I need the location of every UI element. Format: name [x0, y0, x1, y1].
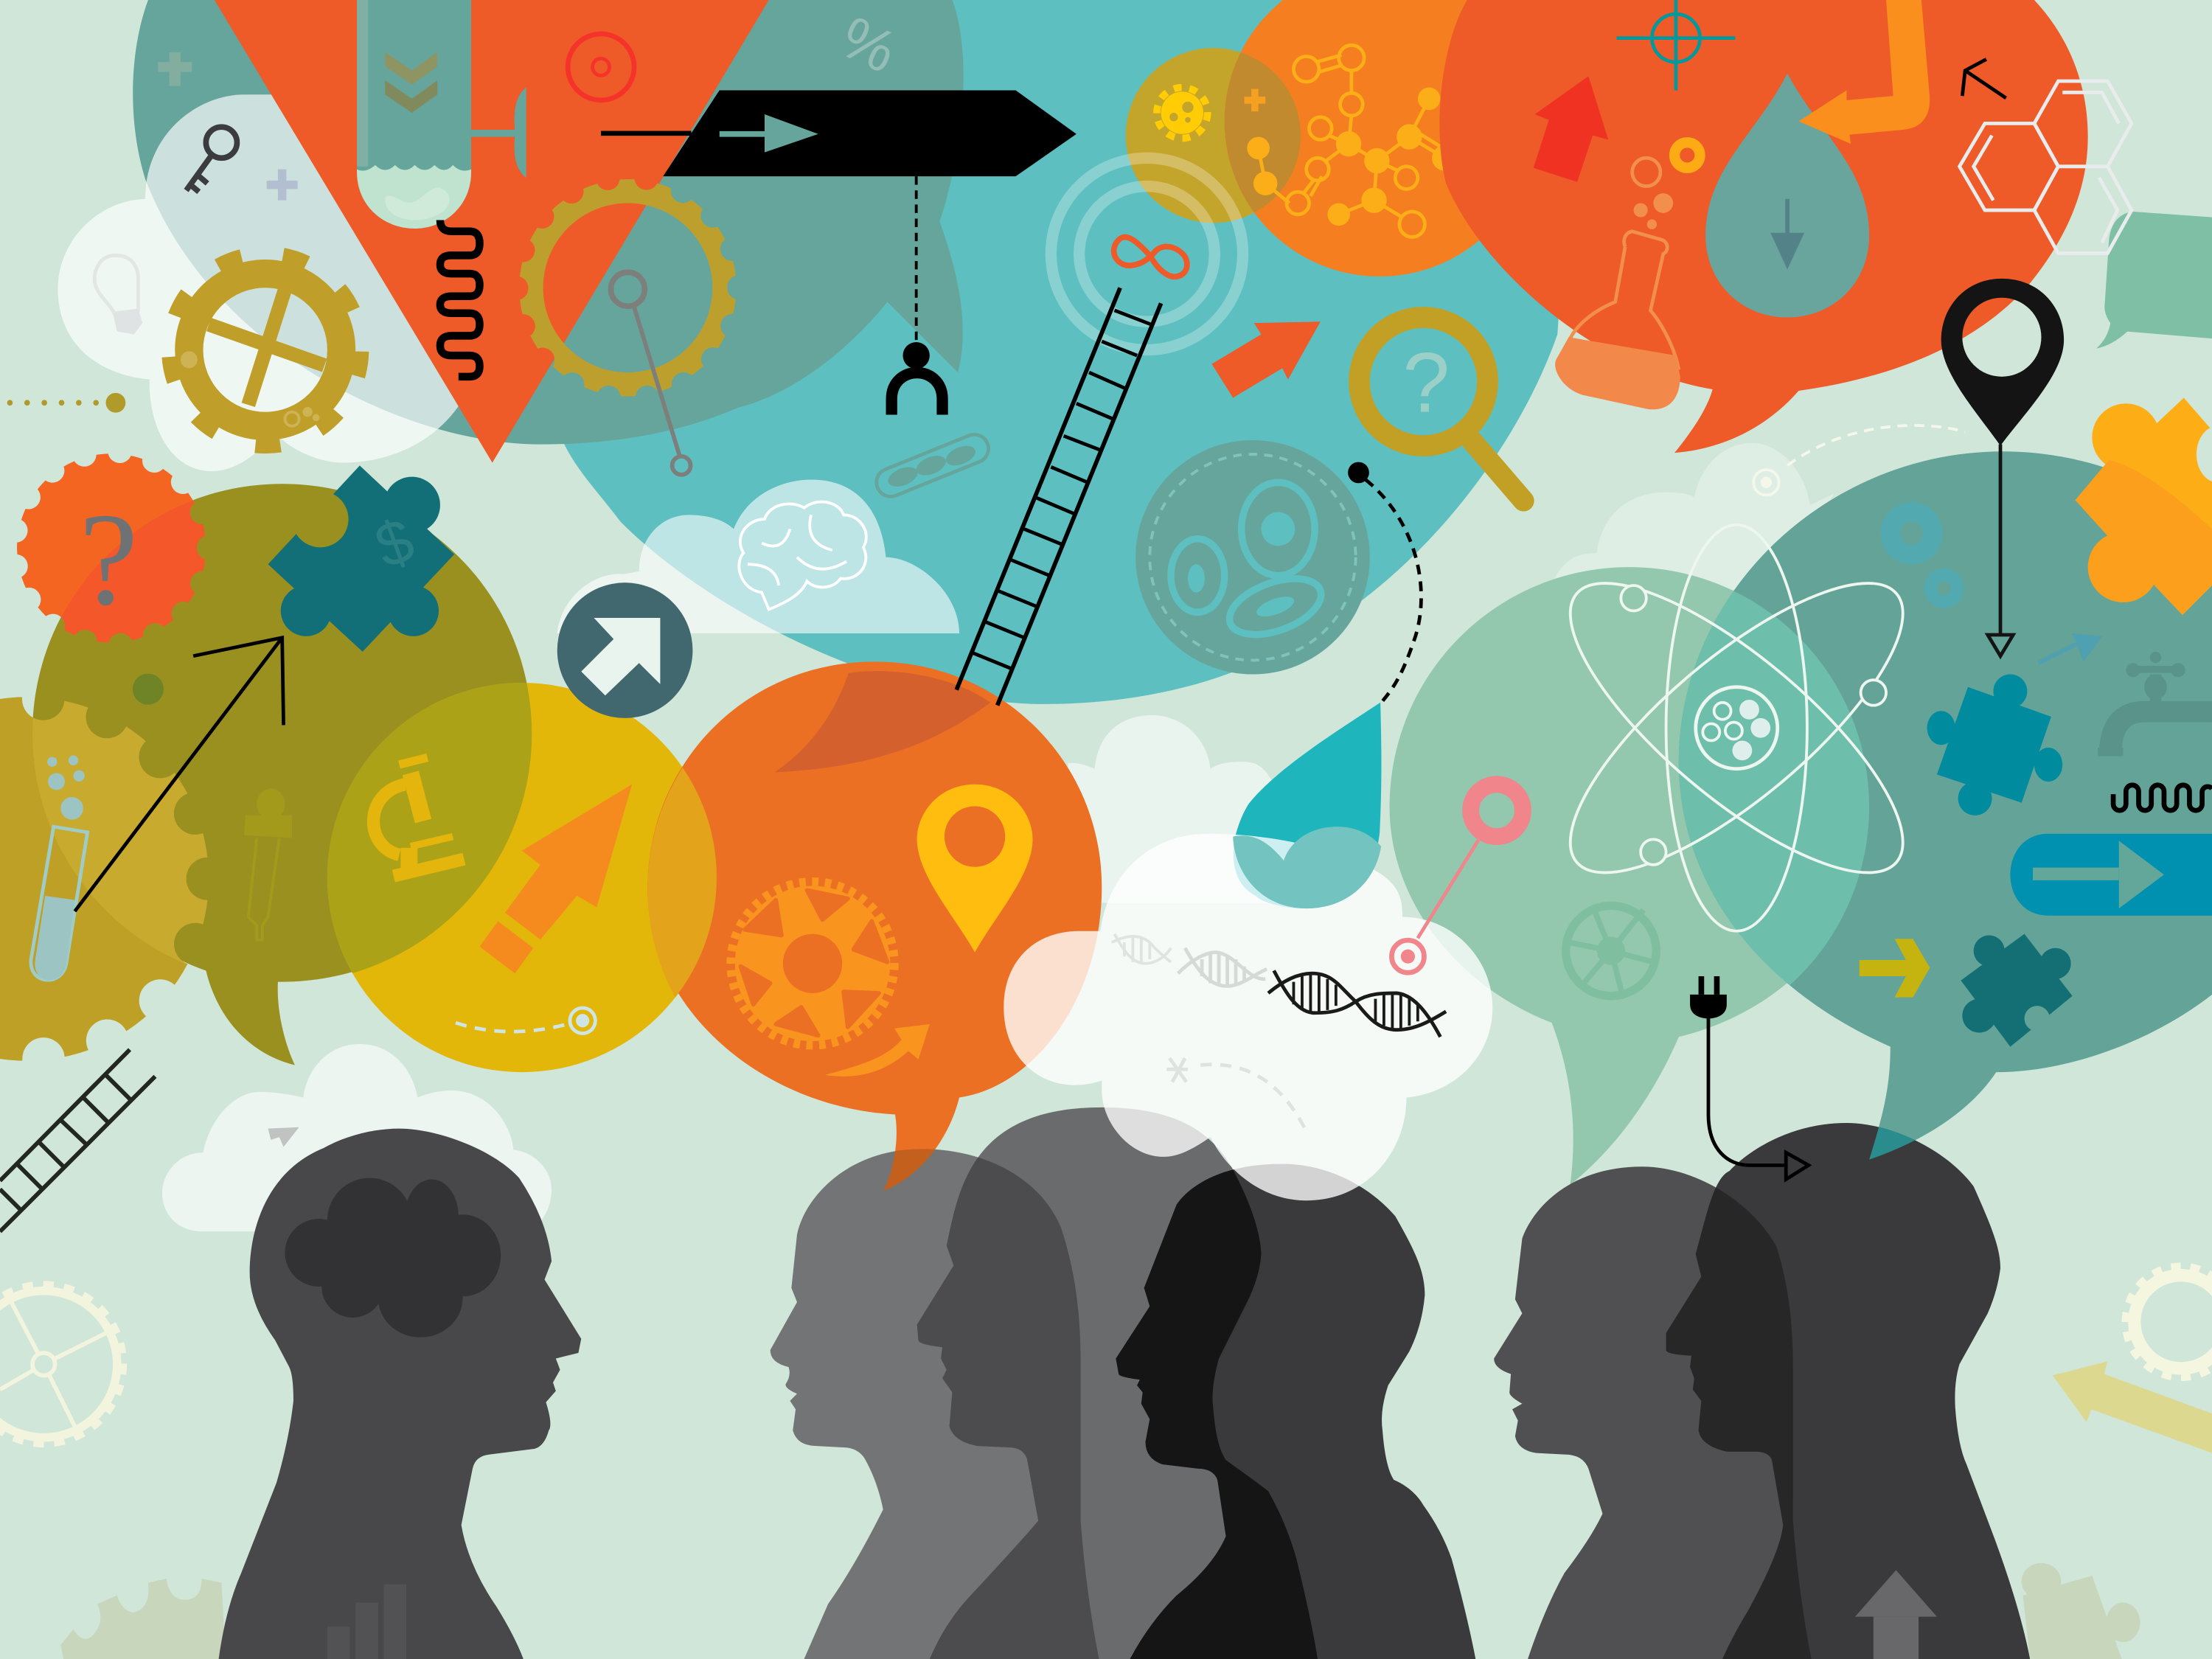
round arrow button — [557, 582, 692, 718]
overlap yellow orange — [647, 768, 717, 998]
curved arrow — [825, 1024, 930, 1077]
tail orange over head — [883, 1149, 935, 1191]
helix dark — [1268, 970, 1446, 1037]
small grey arrow — [268, 1127, 299, 1147]
bubble: olive — [32, 484, 532, 1065]
icon: key — [187, 127, 237, 192]
pill blue arrow — [2010, 834, 2212, 916]
molecule network — [1247, 45, 1472, 237]
squiggle black right — [2113, 785, 2212, 810]
magnifier — [1359, 317, 1523, 501]
gear red: ? — [79, 486, 138, 633]
plus orange — [1245, 89, 1265, 111]
puzzle blue — [1927, 675, 2062, 815]
person 5 — [1494, 1166, 1812, 1659]
red triangle — [215, 0, 769, 463]
cloud: behind left head — [162, 1044, 552, 1231]
up arrow in chest — [1855, 1570, 1937, 1659]
faucet — [2098, 652, 2212, 757]
overlap persons 5 and 6 — [1666, 1187, 1811, 1659]
overlap persons 3 and 4 — [1116, 1169, 1318, 1659]
test tube in olive — [31, 756, 88, 980]
icon: crosshair — [1617, 0, 1735, 90]
dropper — [244, 789, 292, 939]
arrow faded yellow — [2053, 1361, 2212, 1453]
atom — [1531, 525, 1942, 931]
tail teal over head — [1869, 1127, 1916, 1160]
overlap persons 2 and 3 — [917, 1158, 1099, 1659]
arrow orange bent — [1798, 0, 1930, 144]
brain shape head — [285, 1178, 501, 1338]
plus signs — [158, 52, 298, 201]
bubble: green edge right — [2096, 212, 2212, 349]
helix faded middle — [1178, 948, 1267, 986]
dot olive — [133, 674, 164, 705]
pink target — [1391, 785, 1523, 973]
overlap green teal — [1679, 591, 1869, 985]
gear faded bottom left — [60, 1579, 226, 1659]
ladder centre — [956, 288, 1161, 706]
overlap yellow olive — [327, 683, 532, 973]
map pin yellow — [917, 785, 1033, 952]
rings teal — [1891, 512, 1958, 602]
cross dashed path — [1166, 1058, 1307, 1131]
cloud: behind centre — [1068, 715, 1277, 902]
person 6 — [1666, 1123, 2030, 1659]
pill icon — [872, 431, 992, 501]
ladder bottom left — [0, 1049, 155, 1231]
magnifier: ? — [1402, 336, 1450, 431]
bars in chest — [327, 1585, 406, 1659]
puzzle yellow — [2075, 398, 2212, 615]
map pin black with line — [1941, 279, 2064, 656]
cloud: pale left — [58, 94, 473, 471]
drop teal — [1705, 73, 1869, 317]
dashed path and ring — [456, 1008, 595, 1033]
bubble: teal right — [1679, 451, 2212, 1160]
squiggle black — [440, 220, 480, 377]
bubble: teal top left — [133, 0, 964, 445]
bubble: red orange top right — [1439, 0, 2088, 453]
plug and wire — [1690, 976, 1809, 1179]
hexagon molecule — [1960, 81, 2132, 253]
arrow yellow — [1860, 939, 1930, 998]
puzzle dark teal — [1961, 934, 2073, 1047]
arrow red — [1534, 76, 1608, 182]
black arrow — [74, 638, 284, 911]
gear gold left — [0, 697, 209, 1061]
person 2 — [771, 1149, 1099, 1659]
icon: small yellow gear — [1157, 88, 1208, 139]
dashed ring — [1753, 425, 1965, 495]
bubble: large turquoise — [536, 0, 1580, 704]
arrow orange in yellow — [480, 785, 632, 973]
test tube — [357, 0, 526, 229]
drop overlap cloud — [1233, 827, 1381, 908]
small black arrow — [1962, 59, 2006, 98]
black banner arrow — [601, 90, 1077, 176]
icon: target circle — [568, 34, 634, 100]
person 1 — [219, 1129, 581, 1659]
gear red — [17, 453, 206, 642]
helix faded left — [1112, 934, 1171, 964]
flask — [1555, 142, 1700, 409]
overlap gold orange — [1224, 52, 1301, 212]
drop turquoise — [1234, 703, 1381, 908]
dashed curve — [1348, 462, 1421, 701]
percent symbol: % — [830, 4, 906, 86]
claw on dashed line — [891, 176, 942, 415]
gear cream right — [2126, 1267, 2212, 1377]
icon: light bulb — [94, 255, 142, 334]
person 3 — [917, 1107, 1318, 1659]
cloud: behind atom — [1554, 443, 1834, 593]
bubble: yellow — [327, 683, 717, 1072]
small blue arrow — [2039, 633, 2102, 663]
molecule bubble yellow — [1126, 48, 1301, 223]
dotted line — [10, 393, 125, 413]
arrow red small — [1211, 321, 1321, 398]
concentric rings — [1051, 158, 1243, 349]
microscope — [373, 757, 464, 876]
person 4 — [1116, 1164, 1475, 1659]
cloud: brain — [557, 480, 959, 633]
bubble: orange centre — [647, 661, 1102, 1191]
wheel green — [1566, 905, 1656, 996]
puzzle piece teal — [268, 465, 454, 652]
gear cream left — [0, 1285, 122, 1443]
puzzle faded — [2022, 1563, 2140, 1659]
dollar sign: $ — [366, 504, 422, 582]
wedge dark orange — [774, 671, 990, 772]
gear gold centre — [519, 179, 737, 475]
cell — [1135, 440, 1370, 675]
icon: infinity — [1114, 237, 1187, 276]
gear orange — [731, 882, 894, 1046]
bubble: orange circle top — [1225, 0, 1535, 276]
gear large gold — [170, 254, 361, 446]
cloud: white centre — [1004, 834, 1492, 1200]
bubble: green — [1390, 567, 1869, 1185]
